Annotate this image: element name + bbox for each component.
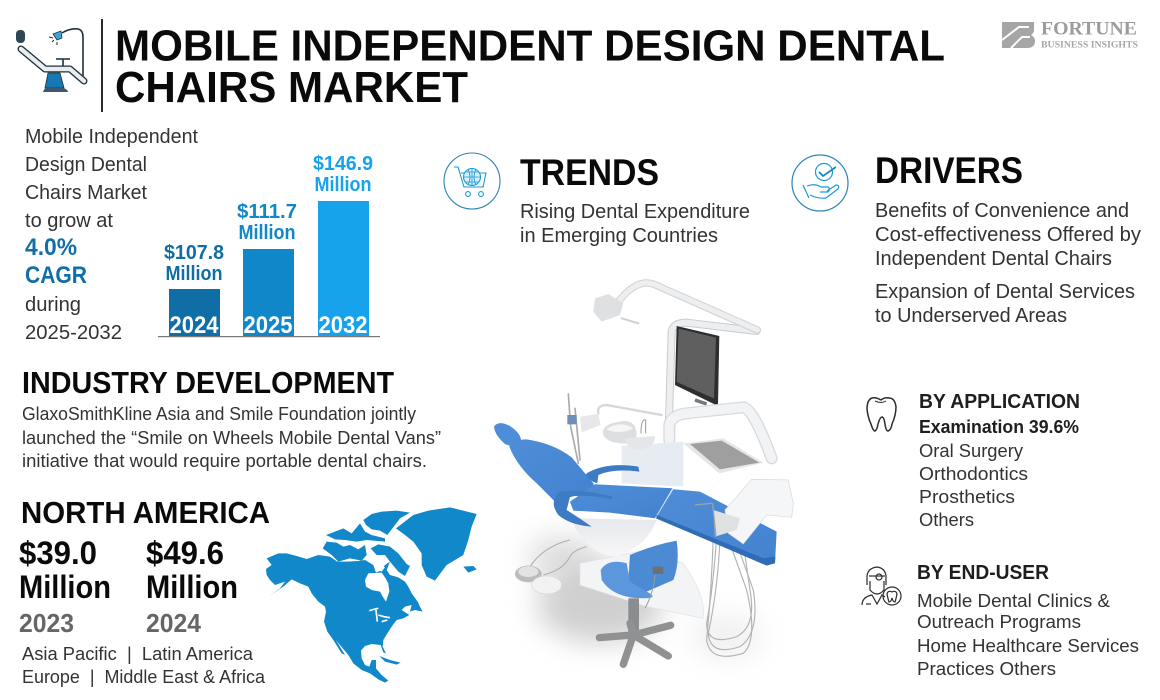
trends panel: in Emerging Countries: [520, 225, 718, 247]
chair base: [572, 518, 704, 618]
title: MOBILE INDEPENDENT DESIGN DENTAL: [115, 22, 945, 70]
bar 2032: Million: [314, 174, 372, 196]
by end-user panel: Home Healthcare Services: [917, 635, 1139, 656]
bar 2025: 2025: [244, 312, 292, 339]
bar 2024: [164, 242, 224, 339]
text block: CAGR summary: to grow at: [25, 210, 113, 232]
regional panel: North America: $49.6: [146, 535, 224, 571]
trends panel: Rising Dental Expenditure: [520, 201, 750, 223]
by application panel: [919, 390, 1080, 530]
regional panel: North America: Million: [146, 569, 238, 605]
bar 2025: Million: [238, 222, 296, 244]
bar 2032: [313, 153, 373, 339]
instrument tray: [683, 438, 763, 473]
by application panel: Examination 39.6%: [919, 417, 1079, 437]
drivers panel: DRIVERS: [875, 150, 1023, 191]
bar 2024: 2024: [170, 312, 219, 339]
logo: Fortune Business Insights: BUSINESS INSIGHTS: [1041, 40, 1138, 50]
headrest and backrest: [494, 423, 595, 502]
industry development panel: GlaxoSmithKline Asia and Smile Foundation jointly: [22, 403, 417, 424]
bar 2024: $107.8: [164, 242, 224, 264]
by application panel: BY APPLICATION: [919, 390, 1080, 413]
drivers panel: Benefits of Convenience and: [875, 200, 1129, 222]
by end-user panel: Mobile Dental Clinics &: [917, 590, 1111, 611]
bar 2032: $146.9: [313, 153, 373, 175]
drivers panel: Cost-effectiveness Offered by: [875, 224, 1141, 246]
text block: CAGR summary: 4.0%: [25, 234, 77, 261]
regional panel: North America: $39.0: [19, 535, 97, 571]
foot pedals: [515, 566, 562, 594]
seat and leg rest: [570, 484, 777, 566]
by end-user panel: BY END-USER: [917, 561, 1049, 584]
bar 2032: 2032: [318, 312, 368, 339]
delivery unit: [695, 479, 793, 544]
armrests: [554, 465, 639, 527]
by end-user panel: [917, 561, 1139, 679]
bar 2025: $111.7: [237, 201, 297, 223]
logo: Fortune Business Insights: [1002, 20, 1138, 50]
regional panel: North America: 2024: [146, 608, 202, 638]
illustration: dental chair unit: [494, 283, 793, 664]
text block: CAGR summary: Chairs Market: [25, 182, 147, 204]
icon: dentist with tooth: [862, 567, 901, 605]
drivers panel: Independent Dental Chairs: [875, 248, 1112, 270]
drivers panel: to Underserved Areas: [875, 305, 1067, 327]
title: CHAIRS MARKET: [115, 63, 468, 112]
by application panel: Orthodontics: [919, 463, 1028, 484]
bar 2025: [237, 201, 297, 339]
industry development panel: INDUSTRY DEVELOPMENT: [22, 365, 394, 400]
trends panel: TRENDS: [520, 152, 659, 193]
instrument arm: [567, 394, 772, 463]
regional panel: North America: Million: [19, 569, 111, 605]
regional panel: North America: Asia Pacific | Latin America: [22, 643, 254, 664]
drivers panel: [875, 150, 1141, 327]
text block: CAGR summary: Mobile Independent: [25, 126, 198, 148]
icon: dental chair: [16, 29, 84, 92]
text block: CAGR summary: CAGR: [25, 262, 87, 289]
by application panel: Prosthetics: [919, 486, 1015, 507]
industry development panel: [22, 365, 441, 471]
by application panel: Others: [919, 509, 974, 530]
by end-user panel: Outreach Programs: [917, 611, 1081, 632]
bar chart: market size: [158, 153, 380, 339]
text block: CAGR summary: 2025-2032: [25, 322, 122, 344]
by end-user panel: Practices Others: [917, 658, 1056, 679]
icon: tooth: [867, 398, 896, 431]
lamp arm and post: [593, 283, 757, 440]
regional panel: North America: 2023: [19, 608, 74, 638]
map: North America: [266, 507, 477, 683]
text block: CAGR summary: during: [25, 294, 81, 316]
title divider: [101, 19, 103, 112]
icon: shopping cart with globe: [444, 153, 500, 209]
trends panel: [520, 152, 750, 247]
hoses: [530, 537, 755, 656]
regional panel: North America: Europe | Middle East & Africa: [22, 666, 266, 687]
logo: Fortune Business Insights: FORTUNE: [1041, 20, 1137, 40]
monitor: [675, 326, 719, 406]
by application panel: Oral Surgery: [919, 440, 1024, 461]
title: [115, 22, 945, 112]
industry development panel: launched the “Smile on Wheels Mobile Dental Vans”: [22, 427, 441, 448]
industry development panel: initiative that would require portable dental chairs.: [22, 450, 427, 471]
regional panel: North America: [19, 495, 270, 687]
text block: CAGR summary: [25, 126, 198, 344]
bar 2024: Million: [166, 263, 222, 285]
drivers panel: Expansion of Dental Services: [875, 281, 1135, 303]
text block: CAGR summary: Design Dental: [25, 154, 147, 176]
icon: hand holding check badge: [792, 155, 848, 211]
floor shadow: [527, 537, 763, 660]
regional panel: North America: NORTH AMERICA: [21, 495, 270, 530]
operator stool: [599, 541, 678, 664]
cabinet and basin: [603, 420, 683, 487]
